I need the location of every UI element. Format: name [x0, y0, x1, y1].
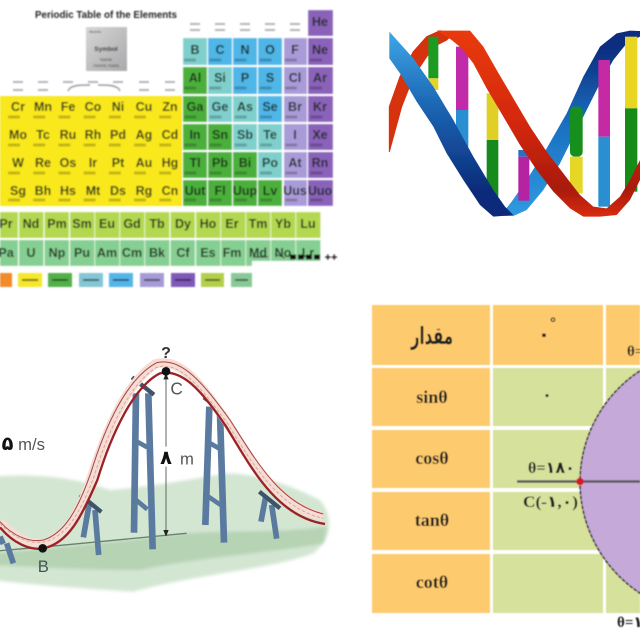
label: height: [159, 447, 194, 469]
point C and height arrow: [162, 367, 170, 537]
row: period 2: Ne: [312, 43, 328, 57]
front strand: red main: [437, 31, 640, 217]
row: period 6: Pb: [212, 156, 228, 170]
row: actinides: Md: [249, 246, 267, 260]
table header row: مقدار: [410, 322, 453, 350]
row: period 5: Sb: [237, 128, 253, 142]
row: sin: sinθ: [416, 387, 448, 407]
row: period 4: Kr: [313, 100, 327, 114]
label: point C: C(-۱,۰): [523, 494, 578, 511]
row: period 4: Ge: [212, 100, 228, 114]
row: period 7: Sg: [10, 184, 26, 198]
row: period 4: Zn: [162, 100, 178, 114]
row: actinides: Es: [200, 246, 216, 260]
row: period 4: Ga: [187, 100, 204, 114]
row: lanthanides: Dy: [175, 217, 191, 231]
row: period 6: [8, 152, 333, 178]
row: period 7: Bh: [35, 184, 51, 198]
row: sin: ۰: [542, 385, 552, 404]
base pair rungs: [428, 37, 637, 207]
element key box: Atomic mass: [93, 63, 120, 68]
row: period 6: At: [288, 156, 302, 170]
row: period 6: W: [12, 156, 24, 170]
row: actinides: Np: [49, 246, 66, 260]
row: period 6: Hg: [162, 156, 178, 170]
overlay strip with scribbled text: [252, 252, 340, 271]
row: actinides: U: [26, 246, 36, 260]
row: period 6: Tl: [189, 156, 201, 170]
element key box: Symbol: [94, 46, 118, 53]
row: period 5: Sn: [212, 128, 228, 142]
row: lanthanides: Er: [225, 217, 239, 231]
row: actinides: Am: [97, 246, 117, 260]
row: period 3: Si: [214, 71, 226, 85]
table header row: [372, 305, 640, 365]
row: period 3: Cl: [289, 71, 301, 85]
row: period 5: Xe: [312, 128, 328, 142]
row: period 7: Uut: [185, 184, 206, 198]
row: lanthanides: Eu: [99, 217, 115, 231]
row: period 2: F: [291, 43, 299, 57]
row: period 5: Pd: [110, 128, 126, 142]
row: period 5: Cd: [162, 128, 178, 142]
row: actinides: Fm: [223, 246, 241, 260]
panel: roller coaster physics diagram: [0, 345, 329, 592]
element key box: [86, 27, 127, 71]
track: [0, 362, 325, 549]
row: period 6: Pt: [112, 156, 125, 170]
transition metals block: [0, 96, 182, 206]
row: period 6: Os: [60, 156, 76, 170]
row: period 3: [183, 67, 333, 94]
row: period 4: [8, 96, 333, 122]
label: B: B: [38, 557, 49, 576]
row: period 4: Cu: [136, 100, 152, 114]
support towers: [0, 377, 280, 563]
row: lanthanides: Tb: [149, 217, 165, 231]
panel: periodic table: [0, 10, 340, 287]
ground line: [0, 533, 187, 551]
row: period 5: [8, 124, 333, 150]
label: C: C: [170, 378, 183, 398]
row: actinides: Lr: [302, 246, 314, 260]
row: period 4: Fe: [61, 100, 75, 114]
row: lanthanides: [0, 212, 320, 238]
element key box: Name: [100, 57, 112, 62]
row: period 6: Rn: [312, 156, 328, 170]
row: period 7: Mt: [86, 184, 101, 198]
row: period 7: Uus: [283, 184, 307, 198]
row: period 7: Uup: [233, 184, 258, 198]
title: Periodic Table of the Elements: [35, 10, 177, 21]
row: period 7: Fl: [214, 184, 226, 198]
row: sin: [372, 368, 640, 426]
row: helium: He: [312, 15, 328, 29]
row: period 7: Ds: [110, 184, 126, 198]
label: height: ۸: [160, 448, 172, 469]
row: period 5: Ag: [136, 128, 152, 142]
row: period 3: Al: [189, 71, 201, 85]
legend: [0, 273, 252, 287]
row: actinides: [0, 240, 320, 266]
row: period 6: Bi: [239, 156, 251, 170]
row: helium: [308, 10, 333, 36]
table header row: °: [550, 315, 556, 332]
back strand: red arc: [389, 31, 452, 152]
overlay strip with scribbled text: ++: [325, 252, 337, 264]
row: period 2: C: [215, 43, 225, 57]
row: period 5: Rh: [85, 128, 101, 142]
row: period 4: Se: [262, 100, 278, 114]
row: period 5: Ru: [60, 128, 76, 142]
label: height: m: [180, 450, 194, 469]
row: lanthanides: Nd: [23, 217, 39, 231]
row: actinides: Bk: [149, 246, 165, 260]
row: actinides: Cm: [122, 246, 142, 260]
row: cos: cosθ: [415, 448, 449, 468]
label: theta 180: θ=۱۸۰: [528, 460, 575, 477]
ground: [0, 473, 329, 592]
label: speed: ۵ m/s: [2, 432, 45, 455]
row: period 7: Lv: [263, 184, 277, 198]
row: cot: cotθ: [416, 572, 448, 592]
row: period 2: O: [265, 43, 275, 57]
row: period 2: B: [190, 43, 200, 57]
row: period 5: I: [293, 128, 297, 142]
row: period 7: Uuo: [308, 184, 333, 198]
row: lanthanides: Yb: [275, 217, 291, 231]
row: period 2: N: [240, 43, 250, 57]
row: period 4: Cr: [11, 100, 25, 114]
row: actinides: Pu: [74, 246, 90, 260]
row: period 7: [8, 180, 333, 206]
unit circle: [517, 349, 640, 615]
row: period 5: Te: [263, 128, 277, 142]
row: period 6: Re: [35, 156, 51, 170]
row: period 2: [183, 38, 333, 65]
row: period 3: S: [266, 71, 274, 85]
table header row: ۰: [538, 322, 550, 346]
row: period 5: Mo: [9, 128, 27, 142]
row: period 6: Po: [262, 156, 278, 170]
row: period 4: Br: [288, 100, 302, 114]
row: lanthanides: Sm: [72, 217, 92, 231]
row: cos: [372, 430, 640, 488]
row: period 6: Ir: [89, 156, 97, 170]
row: period 7: Hs: [60, 184, 76, 198]
panel: DNA double helix: [389, 31, 640, 217]
row: cot: [372, 554, 640, 613]
row: lanthanides: Ho: [200, 217, 217, 231]
row: period 4: Co: [85, 100, 102, 114]
row: actinides: No: [275, 246, 292, 260]
back strand: blue right: [500, 31, 640, 216]
row: lanthanides: Tm: [249, 217, 267, 231]
row: actinides: Cf: [176, 246, 190, 260]
panel: trigonometry table: [372, 305, 640, 631]
row: period 7: Rg: [136, 184, 152, 198]
row: tan: tanθ: [415, 510, 449, 530]
group labels above blocks: [13, 24, 300, 91]
row: tan: [372, 492, 640, 550]
row: period 4: As: [237, 100, 253, 114]
row: period 4: Ni: [112, 100, 124, 114]
front strand: blue left: [389, 32, 513, 217]
point B: [38, 544, 47, 553]
row: period 3: Ar: [313, 71, 327, 85]
row: period 4: Mn: [34, 100, 52, 114]
row: period 5: Tc: [36, 128, 50, 142]
element key box: Atomic: [89, 29, 101, 34]
row: period 6: Au: [136, 156, 152, 170]
row: lanthanides: Lu: [300, 217, 316, 231]
row: period 5: In: [189, 128, 201, 142]
label: question mark: ?: [161, 345, 171, 362]
row: period 7: Cn: [162, 184, 178, 198]
row: lanthanides: Pm: [47, 217, 67, 231]
row: lanthanides: Gd: [123, 217, 141, 231]
row: period 3: P: [241, 71, 249, 85]
